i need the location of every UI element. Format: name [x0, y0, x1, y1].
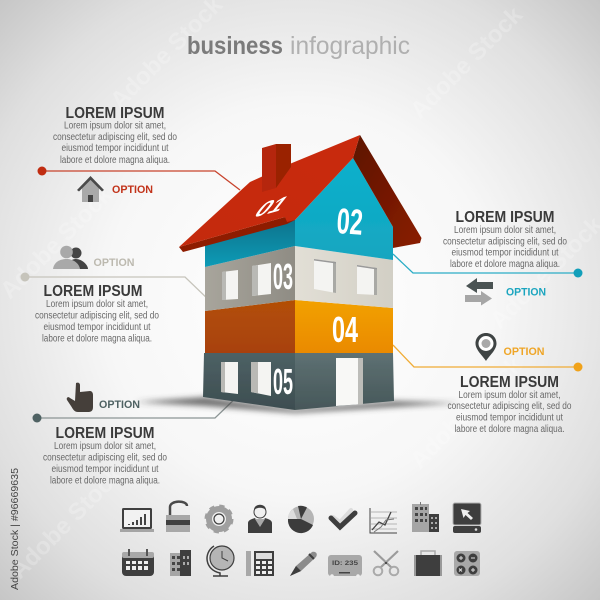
- number 01: 01: [248, 191, 295, 223]
- title: [187, 32, 410, 60]
- text block: upper right: LOREM IPSUM: [456, 209, 554, 226]
- icon: check mark: [331, 510, 355, 527]
- number 04: 04: [332, 309, 358, 350]
- floor 05 dark left wall: [203, 353, 295, 410]
- icon: location pin: [476, 333, 496, 361]
- connector lines: [20, 166, 582, 422]
- text block: upper right: eiusmod tempor incididunt ut: [452, 248, 559, 258]
- connector: option 01: [38, 166, 240, 190]
- text block: upper right: consectetur adipiscing elit, sed do: [443, 236, 567, 248]
- icon row 2: [122, 546, 480, 578]
- icon: line chart: [370, 508, 397, 533]
- house illustration: 03: [273, 256, 293, 297]
- house illustration: 05: [273, 361, 293, 402]
- connector: option 02: [393, 254, 582, 278]
- text block: bottom left: labore et dolore magna aliqua.: [50, 476, 160, 486]
- icon: apartment block: [170, 550, 191, 576]
- connector: option 04: [393, 345, 582, 372]
- stock credit: Adobe Stock | #96669635: [9, 468, 21, 590]
- icon: scissors: [374, 551, 398, 575]
- text block: bottom left: LOREM IPSUM: [56, 425, 154, 442]
- ground shadow: [135, 397, 460, 413]
- icon: people: [53, 246, 88, 269]
- title: infographic: [290, 32, 410, 60]
- connector: option 03: [20, 272, 212, 303]
- icon: id badge: [328, 555, 362, 578]
- floor 04 right wall: [295, 300, 393, 353]
- text block: middle left: [35, 283, 159, 344]
- chimney: [262, 144, 291, 192]
- icon: calendar: [122, 549, 154, 576]
- text block: middle left: Lorem ipsum dolor sit amet,: [46, 299, 148, 310]
- icon: pen: [290, 552, 317, 576]
- connector: option 05: [32, 392, 242, 422]
- watermark: Adobe Stock: [405, 1, 528, 124]
- floor 04 left wall: [205, 300, 295, 353]
- option label: red: OPTION: [112, 184, 153, 196]
- floor 03 left wall: [205, 246, 295, 311]
- icon: laptop chart: [120, 508, 154, 532]
- text block: bottom left: consectetur adipiscing elit, sed do: [43, 452, 167, 464]
- text block: top left: labore et dolore magna aliqua.: [60, 155, 170, 166]
- text block: middle left: eiusmod tempor incididunt ut: [44, 322, 151, 333]
- icon: briefcase: [414, 551, 442, 576]
- icon: gear: [206, 506, 232, 532]
- text block: lower right: labore et dolore magna aliqua.: [454, 424, 564, 435]
- icon: office towers: [412, 502, 439, 532]
- text block: lower right: eiusmod tempor incididunt ut: [456, 412, 563, 424]
- text block: bottom left: Lorem ipsum dolor sit amet,: [54, 441, 156, 452]
- icon: pointing hand: [67, 383, 93, 412]
- floor 05 dark right wall: [295, 353, 394, 410]
- text block: bottom left: eiusmod tempor incididunt ut: [52, 464, 159, 475]
- icon row 1: [120, 502, 481, 533]
- text block: lower right: Lorem ipsum dolor sit amet,: [458, 390, 560, 401]
- text block: top left: consectetur adipiscing elit, sed do: [53, 132, 177, 143]
- text block: top left: eiusmod tempor incididunt ut: [62, 143, 169, 154]
- option label: beige: OPTION: [94, 257, 135, 269]
- watermark: Adobe Stock: [5, 461, 128, 584]
- text block: upper right: labore et dolore magna aliqua.: [450, 259, 560, 270]
- windows: [221, 259, 377, 396]
- text block: upper right: [443, 209, 567, 270]
- icon: id badge: ID: 235: [332, 560, 358, 567]
- number 02: 02: [335, 200, 364, 243]
- icon: math symbols: [454, 551, 480, 576]
- watermark: Adobe Stock: [405, 351, 528, 474]
- roof: [179, 135, 360, 252]
- text block: lower right: [448, 374, 572, 435]
- floor 02 left wall: [205, 215, 295, 267]
- text block: bottom left: [43, 425, 167, 486]
- text block: top left: Lorem ipsum dolor sit amet,: [64, 120, 166, 132]
- option label: slate: OPTION: [99, 399, 140, 411]
- icon: house: [77, 176, 104, 202]
- icon: calculator phone: [246, 551, 274, 576]
- option label: teal: OPTION: [506, 286, 546, 298]
- icon: pie chart: [288, 506, 314, 533]
- icon: computer cursor: [453, 503, 481, 533]
- text block: middle left: labore et dolore magna aliqua.: [42, 334, 152, 344]
- door: [336, 358, 363, 406]
- text block: lower right: LOREM IPSUM: [460, 374, 559, 391]
- text block: top left: [53, 105, 177, 166]
- floor 02 gable: [295, 158, 393, 260]
- floor 03 right wall: [295, 246, 393, 308]
- icon: open padlock: [166, 502, 190, 532]
- icon: businessman: [248, 505, 272, 533]
- title: business: [187, 32, 283, 60]
- icon: globe clock: [207, 546, 234, 576]
- roof underside: [353, 135, 422, 248]
- text block: top left: LOREM IPSUM: [66, 105, 164, 122]
- text block: middle left: consectetur adipiscing elit, sed do: [35, 310, 159, 322]
- house illustration: [135, 135, 460, 413]
- icon: exchange arrows: [465, 278, 493, 306]
- text block: upper right: Lorem ipsum dolor sit amet,: [454, 225, 556, 236]
- text block: lower right: consectetur adipiscing elit, sed do: [448, 401, 572, 412]
- option label: amber: OPTION: [504, 346, 545, 358]
- text block: middle left: LOREM IPSUM: [44, 283, 142, 300]
